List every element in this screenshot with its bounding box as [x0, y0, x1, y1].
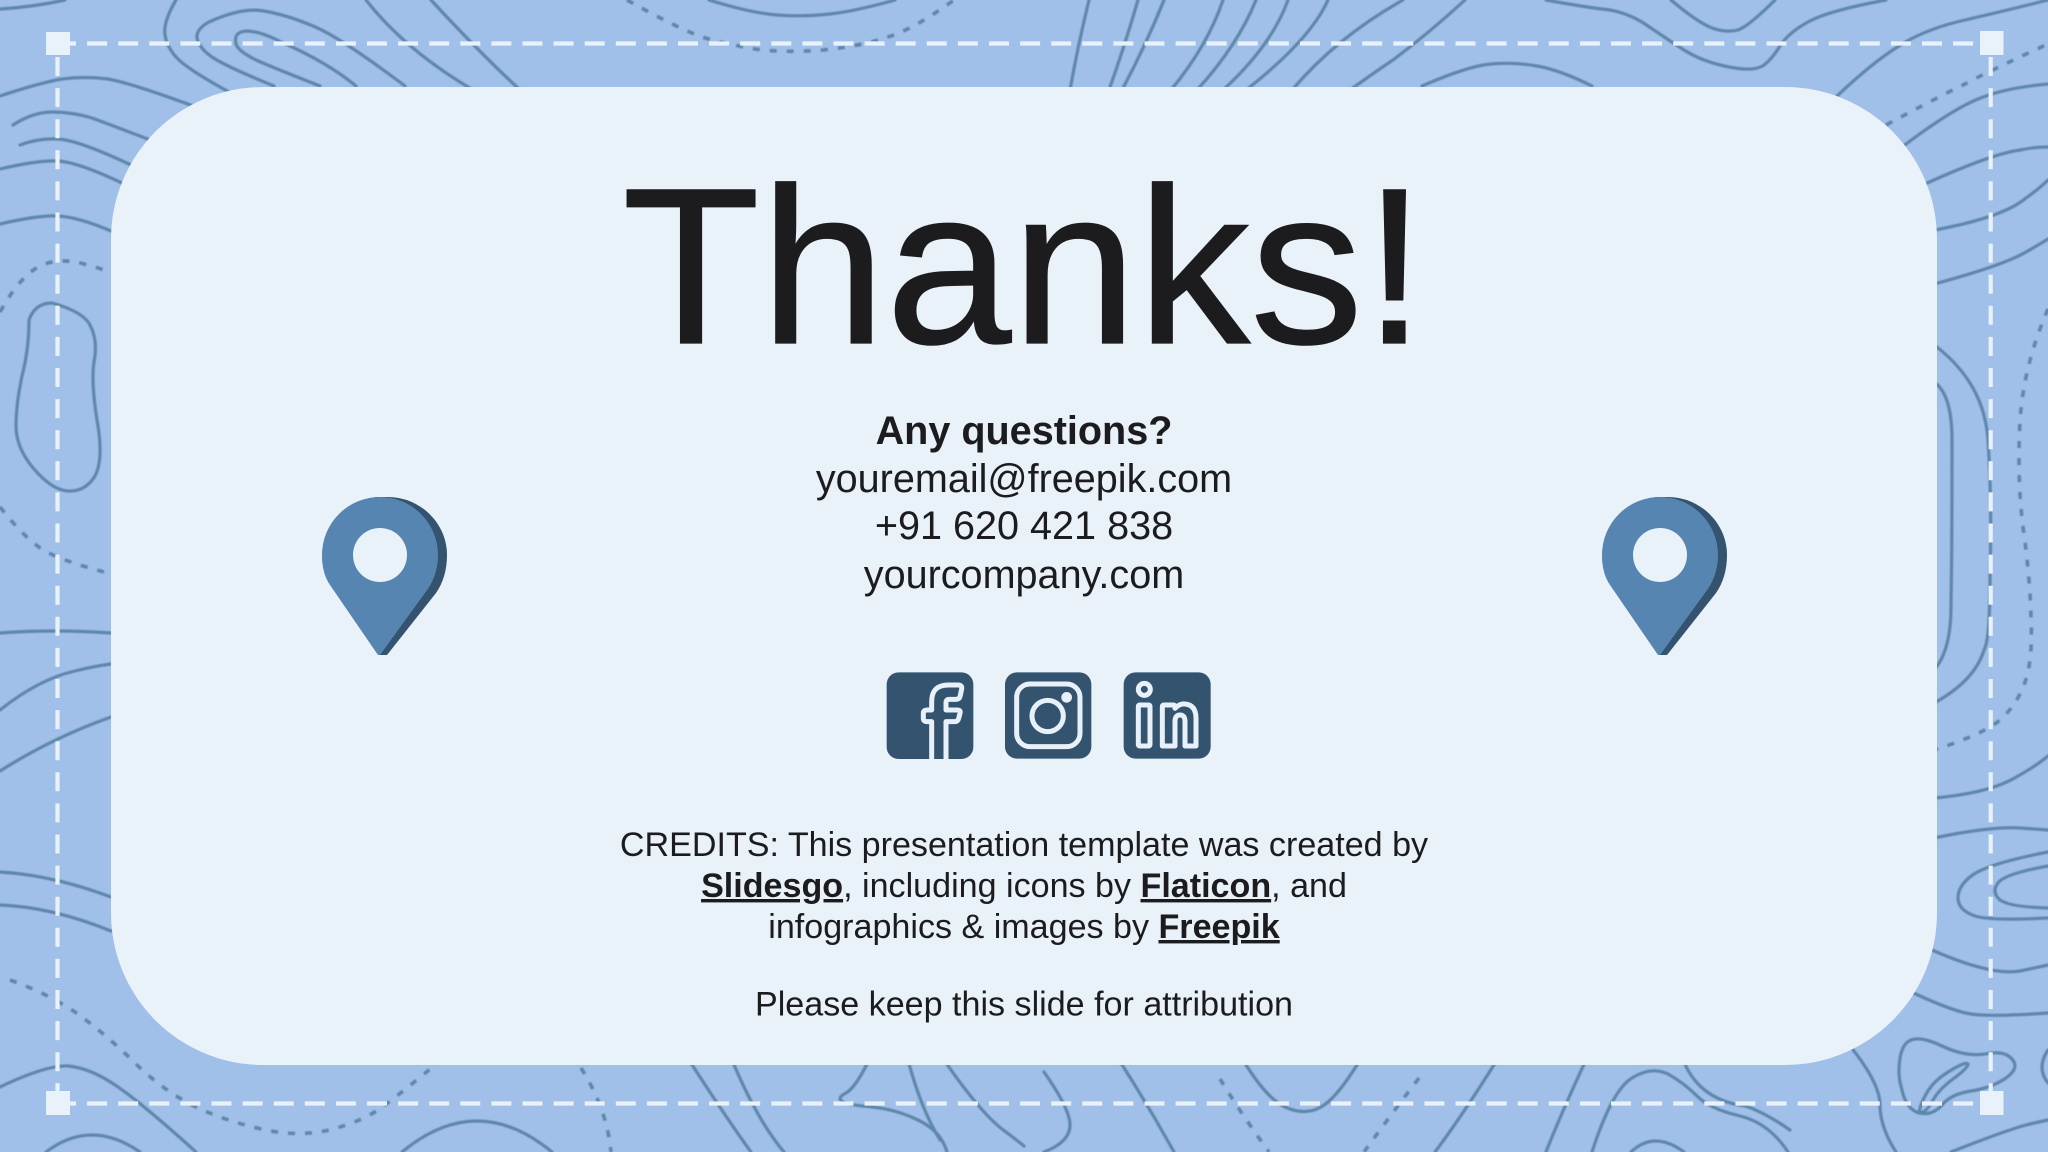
icon: right map pin — [1602, 497, 1727, 655]
icon: facebook — [887, 672, 973, 759]
icon: linkedin — [1124, 672, 1211, 759]
icon: left map pin — [322, 497, 447, 655]
credits line 1: CREDITS: This presentation template was created by — [620, 826, 1428, 864]
credits line 3: infographics & images by Freepik — [768, 908, 1280, 946]
title: Thanks! — [622, 142, 1426, 391]
phone: +91 620 421 838 — [875, 504, 1173, 548]
attribution note: Please keep this slide for attribution — [755, 986, 1293, 1024]
icon: instagram — [1005, 672, 1091, 759]
panel: main card — [111, 87, 1937, 1065]
social icons — [887, 672, 1211, 759]
heading: any questions: Any questions? — [876, 409, 1172, 453]
credits line 2: Slidesgo, including icons by Flaticon, and — [701, 867, 1347, 905]
website: yourcompany.com — [864, 553, 1184, 597]
credits text — [620, 826, 1428, 1024]
contact details — [816, 409, 1232, 597]
email: youremail@freepik.com — [816, 457, 1232, 501]
